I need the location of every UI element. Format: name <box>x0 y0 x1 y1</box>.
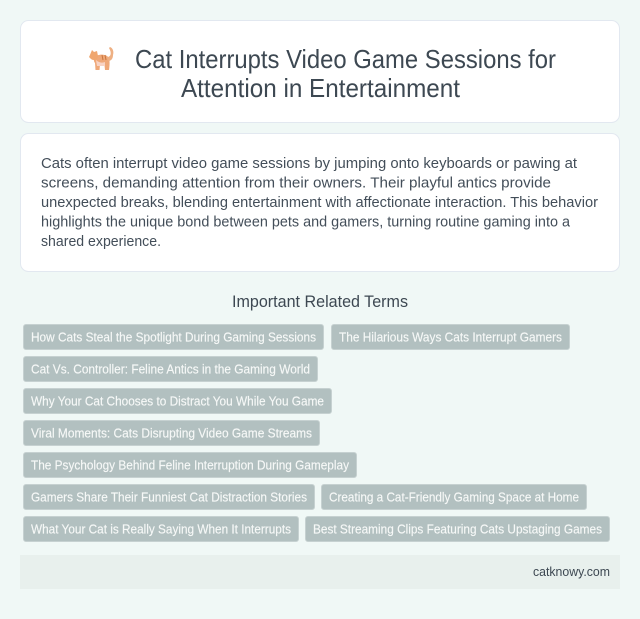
panel: related term tags <box>24 324 610 542</box>
tag: How Cats Steal the Spotlight During Gaming Sessions <box>31 330 316 344</box>
description text: Cats often interrupt video game sessions by jumping onto keyboards or pawing at <box>41 155 578 172</box>
tag: Gamers Share Their Funniest Cat Distraction Stories <box>31 490 307 504</box>
title: Cat Interrupts Video Game Sessions for <box>135 44 556 74</box>
tag <box>332 324 570 350</box>
description text: screens, demanding attention from their owners. Their playful antics provide <box>41 174 551 192</box>
icon: cat <box>89 47 113 70</box>
tag: Creating a Cat-Friendly Gaming Space at Home <box>329 490 579 504</box>
description text: highlights the unique bond between pets and gamers, turning routine gaming into a <box>41 214 571 230</box>
tag: Why Your Cat Chooses to Distract You While You Game <box>31 394 324 408</box>
tag: What Your Cat is Really Saying When It Interrupts <box>31 522 291 536</box>
tag <box>24 452 356 478</box>
panel: title card <box>20 20 620 122</box>
tag <box>24 388 332 414</box>
tag: Best Streaming Clips Featuring Cats Upstaging Games <box>313 522 602 536</box>
description text <box>41 155 598 250</box>
tag: The Psychology Behind Feline Interruption During Gameplay <box>31 458 349 472</box>
title <box>135 44 556 103</box>
title: Attention in Entertainment <box>181 73 461 103</box>
tag: Cat Vs. Controller: Feline Antics in the Gaming World <box>31 362 310 376</box>
tag <box>24 324 324 350</box>
tag <box>322 484 586 510</box>
footer site name: catknowy.com <box>533 564 610 579</box>
description text: unexpected breaks, blending entertainment with affectionate interaction. This behavior <box>41 194 598 211</box>
tag <box>306 516 610 542</box>
tag <box>24 356 318 382</box>
tag <box>24 420 320 446</box>
heading: related terms: Important Related Terms <box>232 293 408 311</box>
footer <box>20 555 620 589</box>
description text: shared experience. <box>41 233 161 250</box>
panel: description card <box>20 134 620 272</box>
tag: Viral Moments: Cats Disrupting Video Game Streams <box>31 426 312 440</box>
tag <box>24 484 314 510</box>
tag: The Hilarious Ways Cats Interrupt Gamers <box>339 330 562 344</box>
tag <box>24 516 298 542</box>
